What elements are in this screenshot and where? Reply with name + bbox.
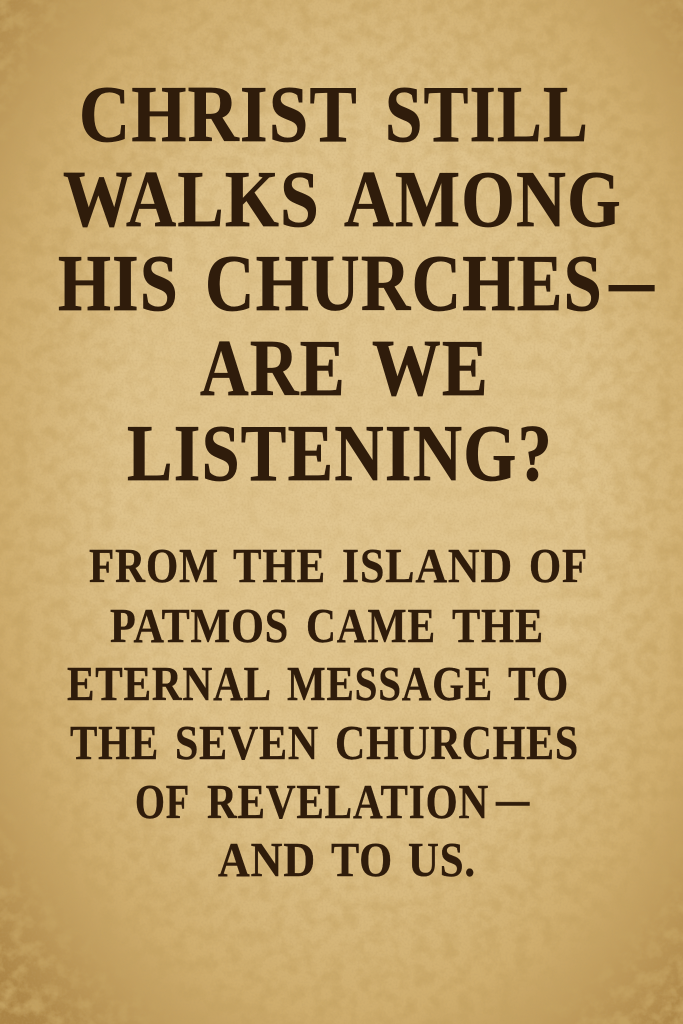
subtitle: CHURCHES <box>335 715 579 770</box>
subtitle: OF <box>135 774 190 829</box>
subtitle: PATMOS <box>110 598 289 653</box>
subtitle: ISLAND <box>342 538 513 593</box>
subtitle <box>67 538 588 887</box>
subtitle: TO <box>508 656 569 711</box>
title: HIS <box>58 238 179 328</box>
subtitle: THE <box>70 715 159 770</box>
subtitle: AND <box>218 832 316 887</box>
subtitle: THE <box>233 538 326 593</box>
title: WALKS <box>63 154 320 244</box>
subtitle: US. <box>408 832 476 887</box>
subtitle: TO <box>331 832 393 887</box>
subtitle: THE <box>452 598 544 653</box>
title: ARE <box>200 323 346 413</box>
title: LISTENING? <box>127 408 553 498</box>
title <box>58 69 655 498</box>
subtitle: FROM <box>89 538 219 593</box>
subtitle: SEVEN <box>175 715 319 770</box>
title: STILL <box>385 69 589 159</box>
title: WE <box>372 323 489 413</box>
subtitle: ETERNAL <box>67 656 272 711</box>
title: CHRIST <box>79 69 358 159</box>
subtitle: CAME <box>306 598 436 653</box>
subtitle: — <box>495 771 530 826</box>
title: CHURCHES <box>205 238 603 328</box>
subtitle: REVELATION <box>207 774 489 829</box>
title: AMONG <box>344 154 622 244</box>
subtitle: OF <box>529 538 588 593</box>
subtitle: MESSAGE <box>287 656 493 711</box>
